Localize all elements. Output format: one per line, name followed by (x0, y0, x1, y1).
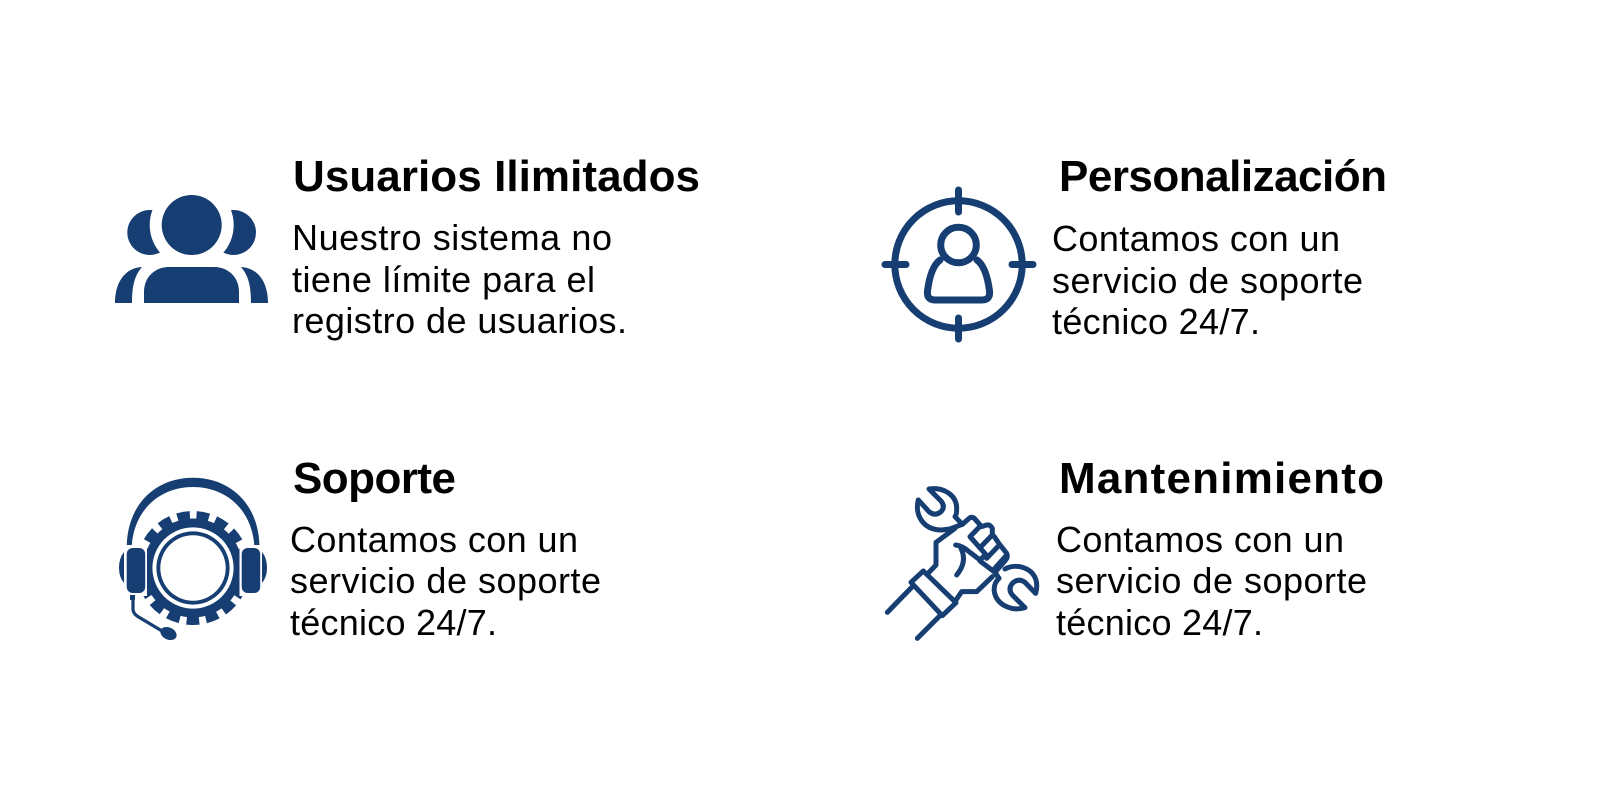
panel: usuarios ilimitados (115, 152, 700, 341)
heading: soporte: Soporte (293, 454, 456, 503)
text block: mantenimiento description: Contamos con un (1056, 519, 1344, 560)
text block: usuarios description: tiene límite para el (292, 259, 595, 300)
panel: personalización (885, 152, 1387, 342)
text block: personalización description: técnico 24/7. (1052, 301, 1260, 342)
heading: personalización: Personalización (1059, 152, 1387, 201)
text block: personalización description: servicio de soporte (1052, 260, 1363, 301)
icon: fist holding wrench (887, 489, 1037, 638)
icon: group of users (115, 183, 268, 303)
heading: mantenimiento: Mantenimiento (1059, 454, 1384, 503)
text block: usuarios description: Nuestro sistema no (292, 217, 612, 258)
text block: usuarios description (292, 217, 627, 341)
text block: usuarios description: registro de usuarios. (292, 300, 627, 341)
text block: mantenimiento description: técnico 24/7. (1056, 602, 1263, 643)
text block: mantenimiento description (1056, 519, 1367, 643)
text block: personalización description: Contamos con un (1052, 218, 1340, 259)
panel: mantenimiento (887, 454, 1384, 643)
text block: soporte description: servicio de soporte (290, 560, 601, 601)
text block: personalización description (1052, 218, 1363, 342)
text block: soporte description: Contamos con un (290, 519, 578, 560)
heading: usuarios ilimitados: Usuarios Ilimitados (293, 152, 700, 201)
text block: soporte description (290, 519, 601, 643)
icon: gear with headset (119, 478, 267, 643)
text block: soporte description: técnico 24/7. (290, 602, 497, 643)
panel: soporte (119, 454, 601, 643)
icon: target with person (885, 190, 1033, 339)
text block: mantenimiento description: servicio de soporte (1056, 560, 1367, 601)
